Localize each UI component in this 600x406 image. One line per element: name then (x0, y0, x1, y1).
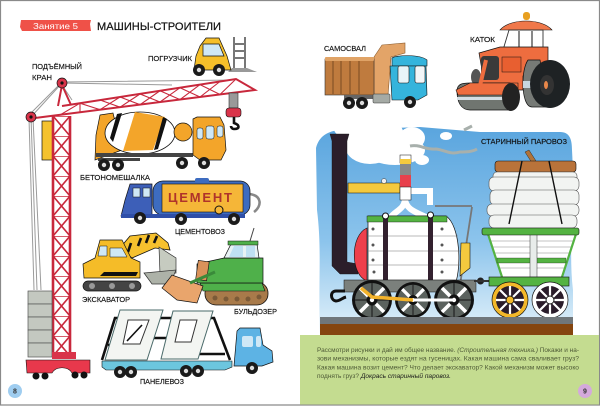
label: dump truck: САМОСВАЛ (324, 44, 366, 53)
yellow pipe (348, 183, 400, 193)
label: mixer: БЕТОНОМЕШАЛКА (80, 173, 150, 182)
label: crane (32, 62, 82, 82)
lesson badge: Занятие 5 (33, 22, 79, 31)
boiler (354, 212, 461, 290)
crane cabin (42, 121, 54, 160)
instructions: поднять груз? Докрась старинный паровоз. (317, 372, 451, 380)
crane (26, 78, 255, 380)
label: crane: ПОДЪЁМНЫЙ (32, 62, 82, 71)
label: excavator: ЭКСКАВАТОР (82, 295, 130, 304)
clouds (334, 121, 489, 165)
excavator (83, 233, 176, 291)
rod (435, 206, 472, 285)
crane pulleys (26, 78, 67, 122)
train scene (316, 121, 579, 335)
forklift (193, 37, 257, 76)
label: forklift: ПОГРУЗЧИК (148, 54, 193, 63)
rear yellow tank (460, 243, 470, 276)
label: bulldozer: БУЛЬДОЗЕР (234, 307, 277, 316)
label: panel carrier: ПАНЕЛЕВОЗ (140, 377, 184, 386)
label: crane: КРАН (32, 73, 52, 82)
title: МАШИНЫ-СТРОИТЕЛИ (97, 21, 221, 33)
instructions: Какая машина возит цемент? Что делает экскаватор? Какой механизм может высоко (317, 364, 579, 372)
panel carrier (102, 310, 273, 378)
crane jib (35, 79, 255, 118)
white steam pipes (390, 191, 430, 219)
crane hook (226, 93, 241, 129)
crane base (26, 352, 90, 380)
locomotive wheels (352, 280, 474, 320)
instructions (317, 346, 579, 380)
frame and hook (332, 278, 490, 301)
concrete mixer (95, 112, 226, 171)
instructions: зови механизмы, которые ездят на гусеницах. Какая машина сама сваливает груз? (317, 356, 579, 362)
crane mast (53, 116, 70, 356)
page number 8 (8, 384, 22, 398)
page number 9 (578, 384, 592, 398)
instructions: Рассмотри рисунки и дай им общее название. (Строительная техника.) Покажи и на- (317, 346, 579, 354)
label: cement truck: ЦЕМЕНТОВОЗ (175, 227, 225, 236)
steam (410, 126, 477, 153)
label: old locomotive: СТАРИННЫЙ ПАРОВОЗ (481, 137, 567, 146)
label: roller: КАТОК (470, 35, 496, 44)
bulldozer (162, 228, 268, 305)
lesson badge (20, 20, 91, 31)
dump truck (325, 43, 427, 109)
text panel (300, 335, 599, 404)
cement label text: ЦЕМЕНТ (168, 190, 232, 205)
sky (316, 127, 573, 335)
cement truck (121, 178, 260, 225)
concrete blocks (28, 291, 52, 357)
page number 9: 9 (583, 388, 587, 396)
wagon wheels (492, 282, 568, 318)
smokestack (330, 134, 358, 274)
rails (320, 317, 573, 335)
logs (487, 150, 579, 228)
chimney (400, 155, 411, 200)
crane cables (29, 80, 236, 290)
wagon (482, 228, 579, 286)
road roller (456, 12, 570, 111)
page number 8: 8 (13, 388, 17, 396)
